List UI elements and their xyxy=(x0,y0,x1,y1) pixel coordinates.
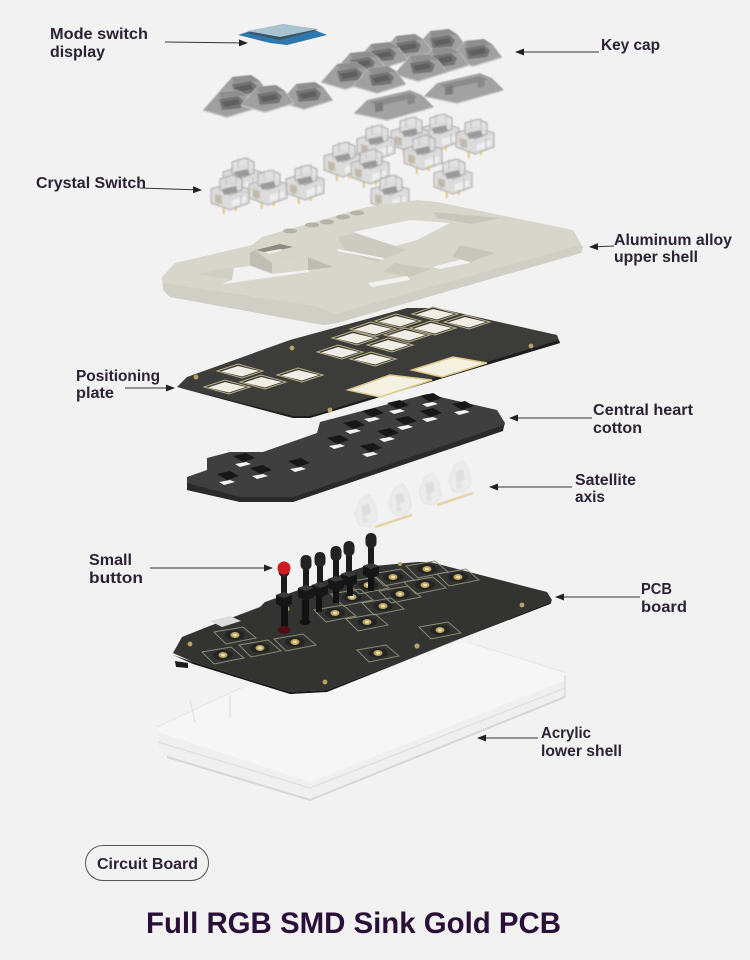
label: key cap: Key cap xyxy=(601,37,660,54)
label: acrylic lower shell xyxy=(478,725,622,760)
PCB board xyxy=(173,561,552,694)
label: satellite axis: Satellite xyxy=(575,472,636,489)
label: positioning plate: Positioning xyxy=(76,368,160,385)
label: satellite axis: axis xyxy=(575,489,605,506)
small button reflections xyxy=(278,573,374,634)
label: crystal switch: Crystal Switch xyxy=(36,175,146,192)
label: positioning plate: plate xyxy=(76,385,114,402)
icon: mode switch display xyxy=(238,24,327,45)
label: pcb board: board xyxy=(641,599,687,616)
label: aluminum alloy upper shell: upper shell xyxy=(614,249,698,266)
label: central heart cotton: cotton xyxy=(593,420,642,437)
label: small button: Small xyxy=(89,552,132,569)
crystal switches: left group xyxy=(211,157,324,214)
aluminum alloy upper shell xyxy=(162,200,583,325)
label: pcb board xyxy=(556,581,687,616)
title: Full RGB SMD Sink Gold PCB xyxy=(146,907,561,940)
label: central heart cotton: Central heart xyxy=(593,402,693,419)
central heart cotton xyxy=(187,393,505,502)
label: mode switch display: display xyxy=(50,44,105,61)
label: central heart cotton xyxy=(510,402,693,437)
top right recess xyxy=(433,212,500,224)
label: mode switch display xyxy=(50,26,247,61)
label: aluminum alloy upper shell xyxy=(590,232,732,266)
circuit board pill xyxy=(86,846,208,880)
label: positioning plate xyxy=(76,368,174,402)
label: mode switch display: Mode switch xyxy=(50,26,148,43)
acrylic lower shell xyxy=(157,642,567,800)
circuit board pill: Circuit Board xyxy=(97,856,198,873)
label: small button xyxy=(89,552,272,587)
label: aluminum alloy upper shell: Aluminum alloy xyxy=(614,232,732,249)
label: acrylic lower shell: Acrylic xyxy=(541,725,591,742)
label: small button: button xyxy=(89,570,143,587)
key caps: right group xyxy=(321,29,504,121)
positioning plate xyxy=(177,307,560,418)
key caps: left group xyxy=(203,75,333,118)
satellite axis xyxy=(355,461,473,527)
small buttons xyxy=(276,533,379,608)
label: pcb board: PCB xyxy=(641,581,672,598)
label: acrylic lower shell: lower shell xyxy=(541,743,622,760)
crystal switches: right group xyxy=(324,113,494,214)
label: satellite axis xyxy=(490,472,636,506)
